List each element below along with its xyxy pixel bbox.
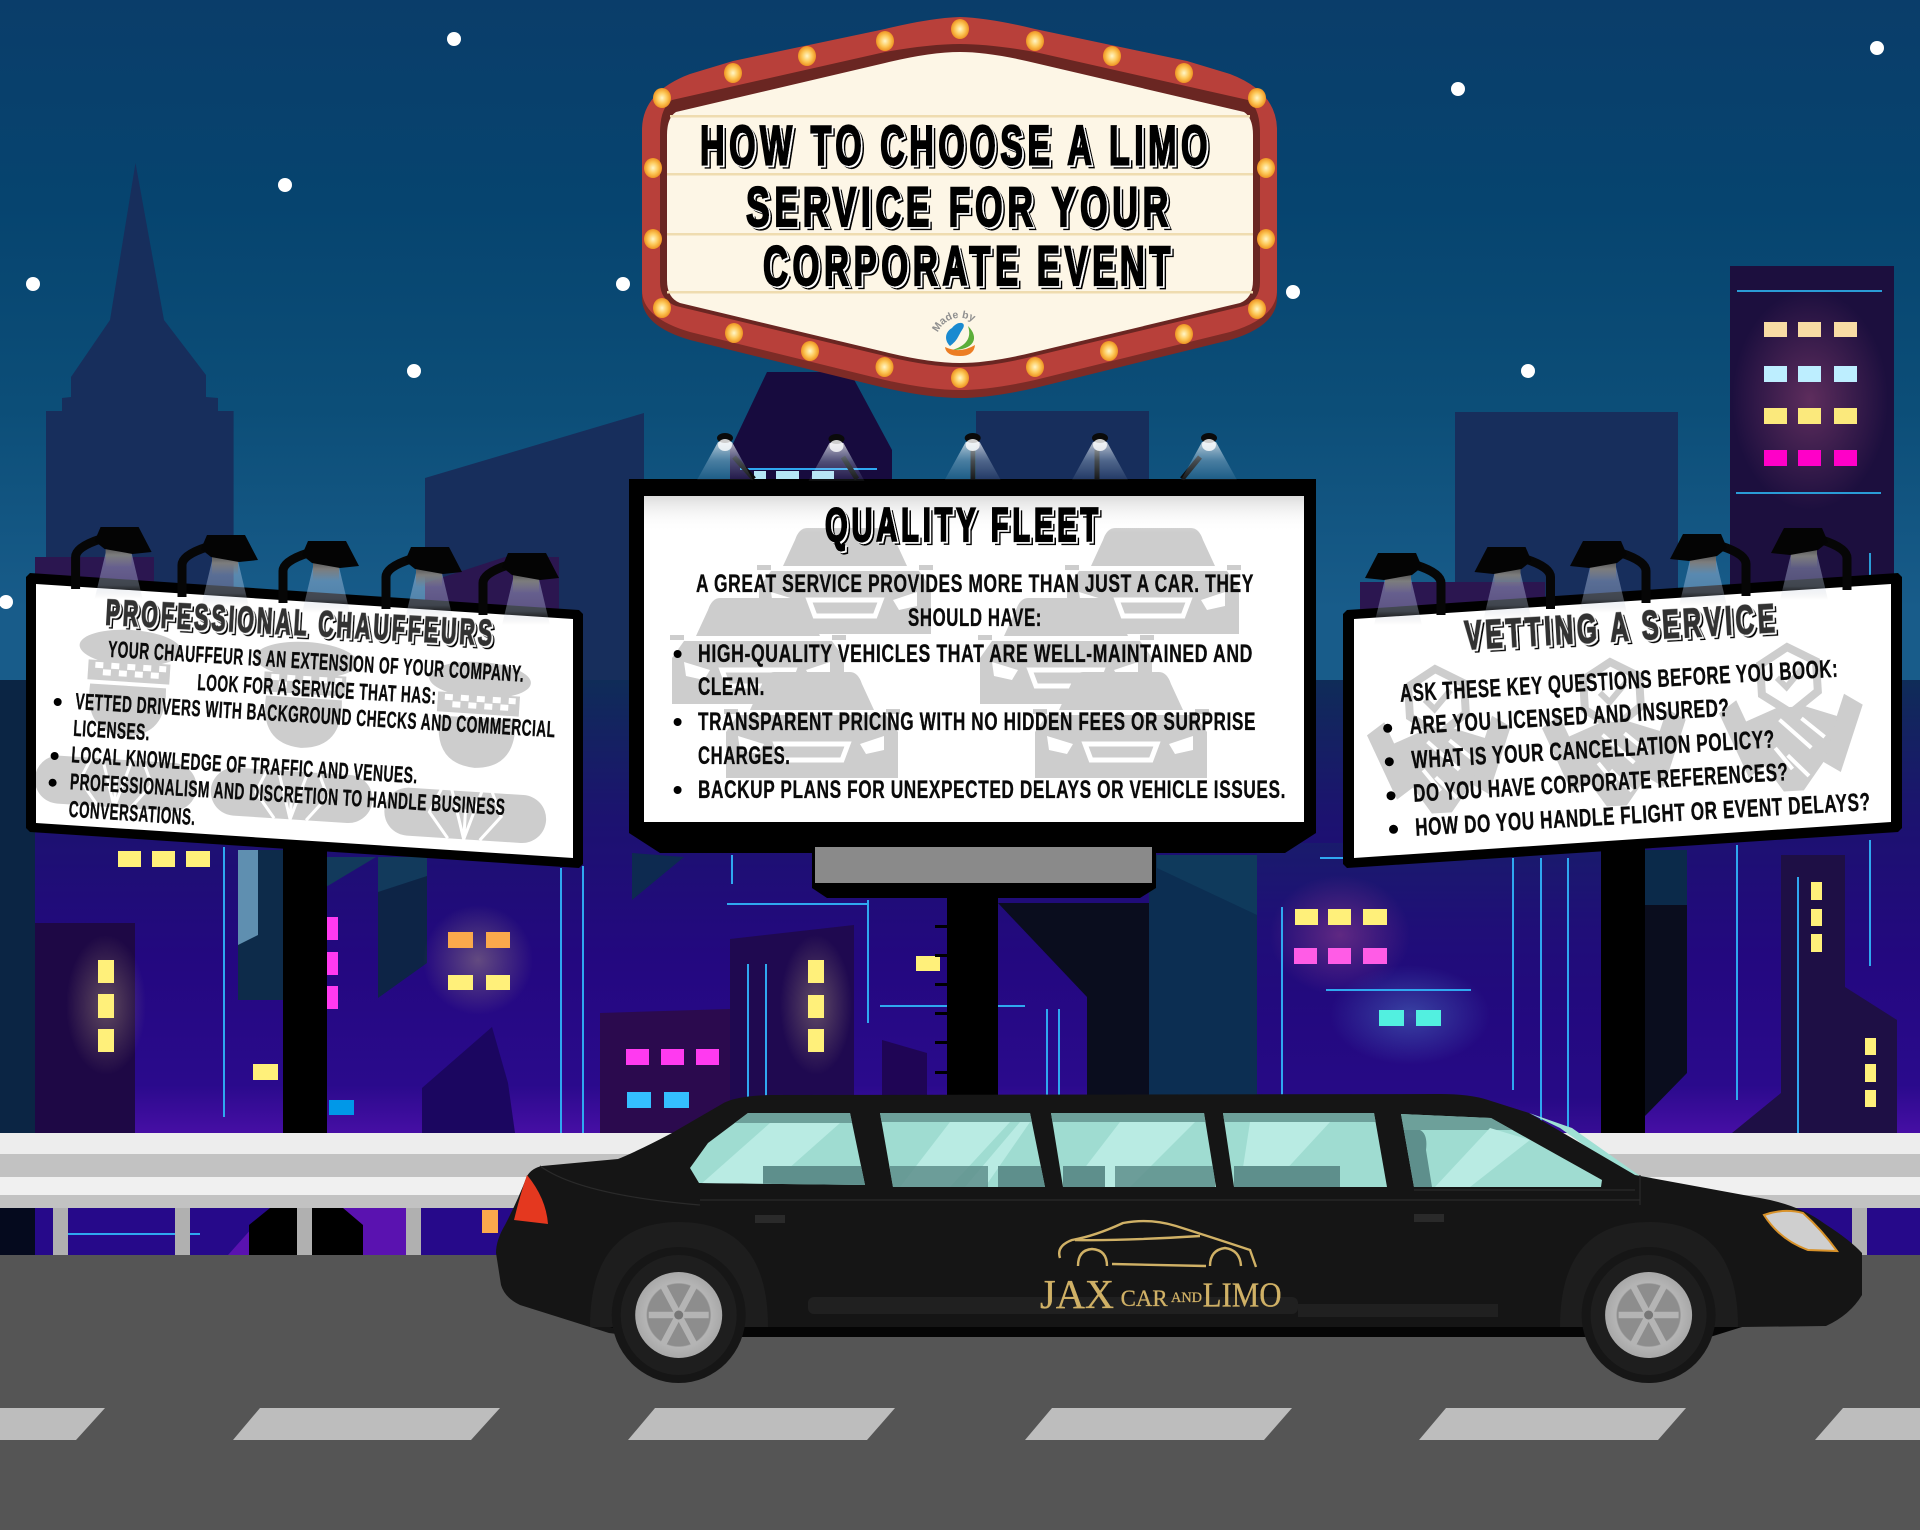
body text lines: YOUR CHAUFFEUR IS AN EXTENSION OF YOUR COMPANY.	[107, 636, 525, 687]
body text lines right	[1383, 655, 1871, 842]
center city blocks	[632, 853, 1257, 1133]
body text lines center: CLEAN.	[698, 673, 765, 701]
logo: jax car and limo: AND	[1171, 1290, 1202, 1306]
chauffeur silhouettes	[33, 624, 556, 845]
body text lines center: TRANSPARENT PRICING WITH NO HIDDEN FEES OR SURPRISE	[698, 708, 1256, 736]
logo: jax car and limo: JAX	[1040, 1271, 1114, 1317]
distant skyline	[0, 163, 1920, 1140]
grey plate	[815, 847, 1152, 883]
headlight	[1764, 1211, 1837, 1251]
logo: jax car and limo	[1040, 1221, 1282, 1317]
icon: made by badge: Made by	[932, 310, 976, 332]
lamps right billboard	[1365, 528, 1847, 625]
marquee cream panel	[667, 52, 1253, 363]
billboard frame left	[26, 573, 583, 868]
stars	[0, 32, 1884, 609]
billboard frame right	[1343, 573, 1902, 868]
body text lines center	[674, 570, 1286, 804]
body text lines: LOOK FOR A SERVICE THAT HAS:	[197, 669, 437, 709]
wheels	[612, 1247, 746, 1383]
body text lines: CONVERSATIONS.	[68, 796, 197, 830]
limousine	[496, 1094, 1862, 1383]
billboard frame center	[629, 479, 1316, 898]
heading: professional chauffeurs: PROFESSIONAL CHAUFFEURS	[105, 592, 496, 654]
windows	[680, 1113, 1602, 1187]
heading: quality fleet: QUALITY FLEET	[825, 498, 1102, 551]
marquee red frame	[642, 17, 1277, 390]
body text lines: PROFESSIONALISM AND DISCRETION TO HANDLE BUSINESS	[69, 768, 506, 820]
road with lane markings	[0, 1255, 1920, 1530]
lamps left billboard	[76, 527, 559, 625]
body text lines center: HIGH-QUALITY VEHICLES THAT ARE WELL-MAINTAINED AND	[698, 640, 1253, 668]
wheel arches	[590, 1222, 768, 1327]
limo body	[496, 1094, 1862, 1337]
panel: vetting a service billboard	[1343, 573, 1902, 868]
body text lines center: SHOULD HAVE:	[908, 604, 1042, 632]
marquee bulbs	[644, 19, 1275, 388]
handshake icons	[1363, 643, 1868, 817]
body text lines center: A GREAT SERVICE PROVIDES MORE THAN JUST A CAR. THEY	[696, 570, 1254, 598]
body text lines	[49, 636, 556, 830]
logo: jax car and limo: CAR	[1121, 1286, 1168, 1311]
center building windows and line	[740, 468, 877, 481]
title text: SERVICE FOR YOUR	[746, 175, 1173, 238]
lower left city blocks	[35, 847, 730, 1133]
body text lines: LOCAL KNOWLEDGE OF TRAFFIC AND VENUES.	[71, 741, 419, 788]
body text lines: VETTED DRIVERS WITH BACKGROUND CHECKS AND COMMERCIAL	[75, 688, 556, 742]
body text lines center: CHARGES.	[698, 742, 790, 770]
icon: made by badge	[932, 310, 976, 356]
lamps center billboard	[697, 433, 1237, 481]
panel: quality fleet billboard	[629, 479, 1316, 898]
tail light	[514, 1175, 548, 1224]
logo: jax car and limo: LIMO	[1203, 1276, 1282, 1315]
title text	[700, 114, 1212, 297]
title text: HOW TO CHOOSE A LIMO	[700, 114, 1212, 176]
title marquee sign	[642, 17, 1277, 398]
tall tower with lit windows	[1730, 266, 1894, 626]
right city blocks	[1257, 840, 1897, 1133]
body text lines right: ARE YOU LICENSED AND INSURED?	[1409, 694, 1730, 740]
title text: CORPORATE EVENT	[763, 234, 1175, 297]
car silhouettes	[644, 496, 1304, 778]
windshield strip	[1529, 1113, 1652, 1178]
body text lines: LICENSES.	[73, 715, 151, 745]
guard rail	[0, 1133, 1920, 1255]
body text lines center: BACKUP PLANS FOR UNEXPECTED DELAYS OR VEHICLE ISSUES.	[698, 776, 1286, 804]
billboard posts	[283, 830, 1645, 1135]
night sky	[0, 0, 1920, 680]
panel: professional chauffeurs billboard	[26, 573, 583, 868]
marquee frame shadow	[642, 25, 1277, 398]
